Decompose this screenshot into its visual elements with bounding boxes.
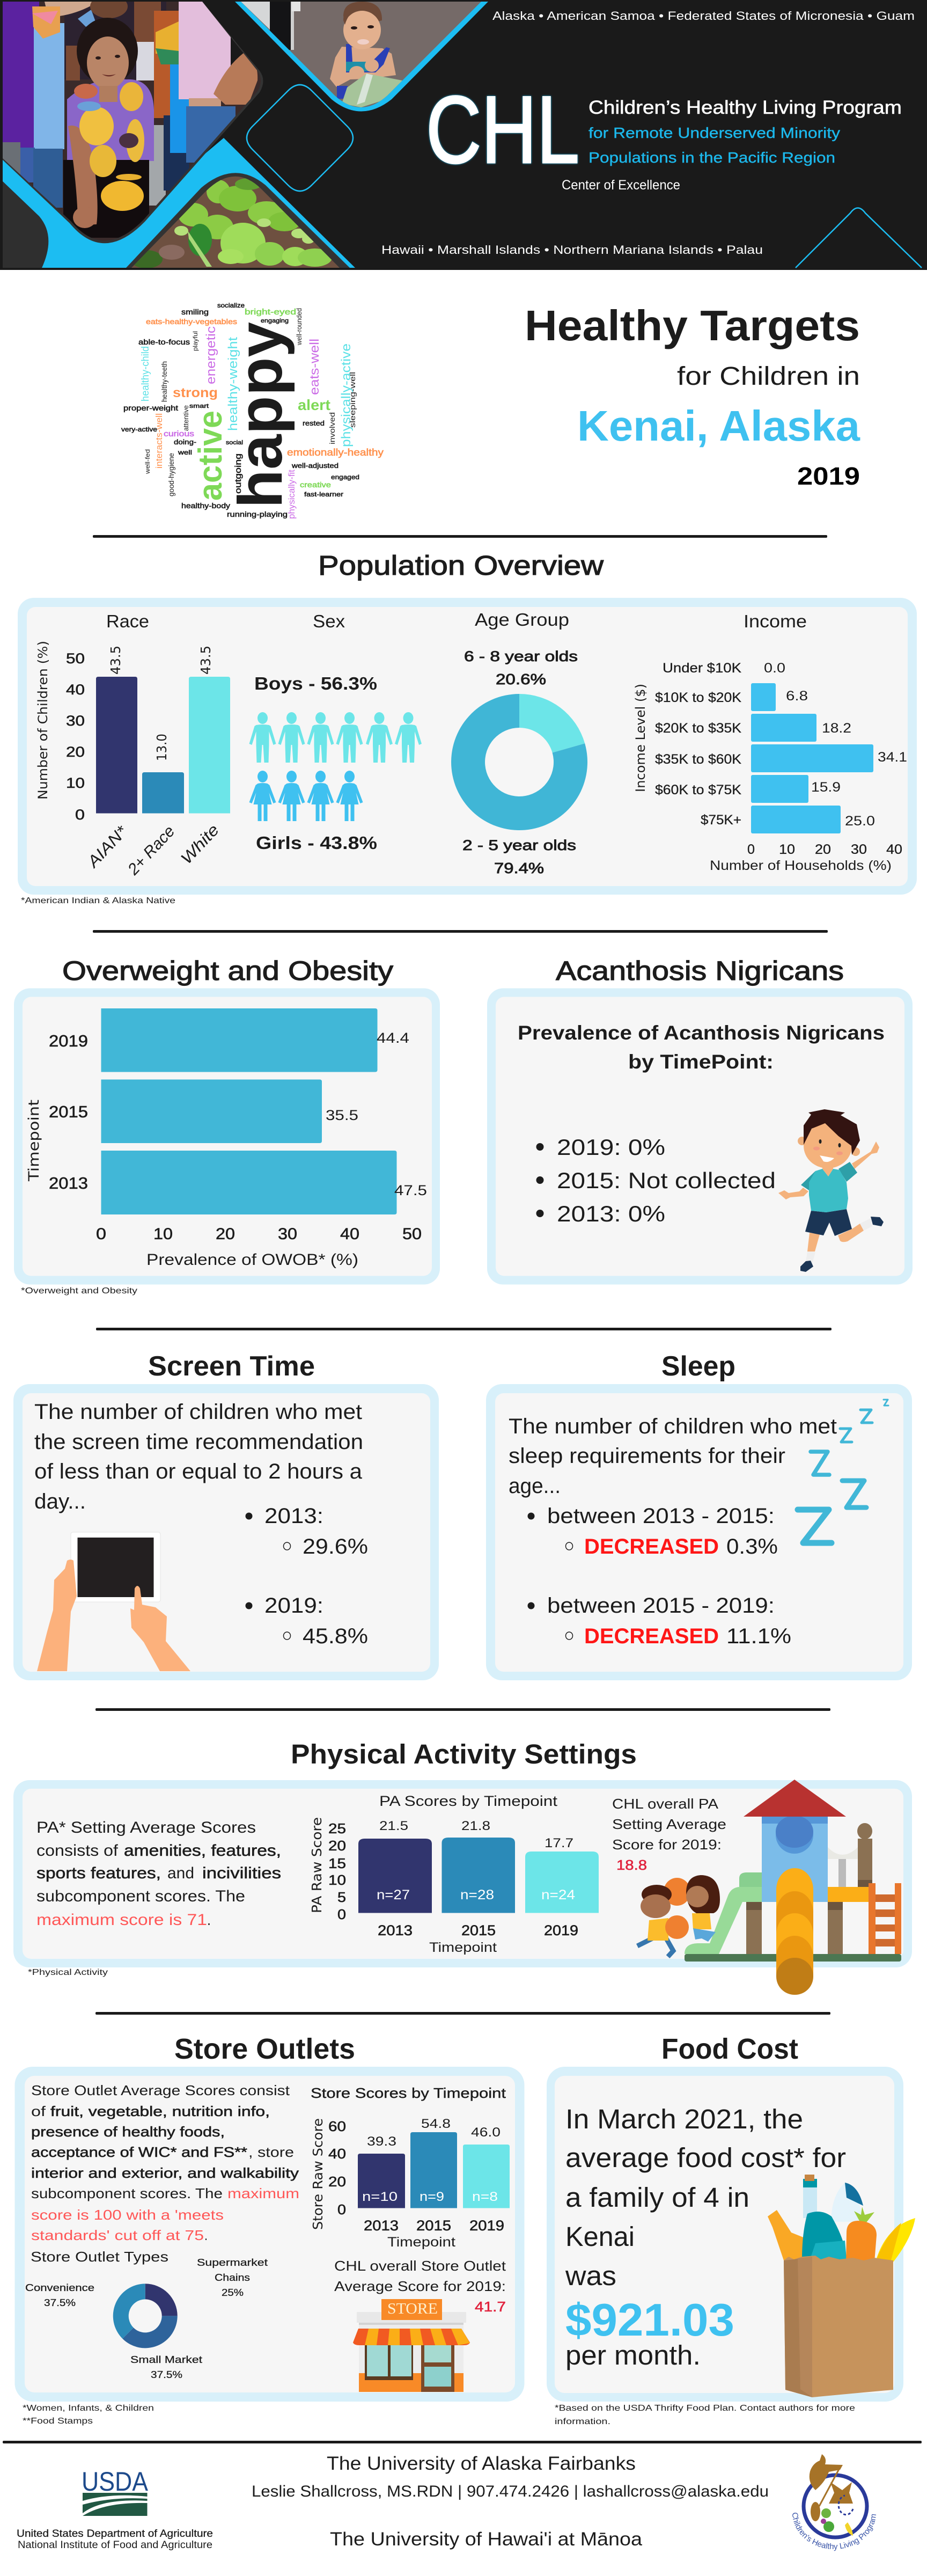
heading: Sleep: Sleep [661,1351,735,1382]
text block: screen time intro: of less than or equal to 2 hours a [34,1460,363,1483]
heading: Population Overview: Population Overview [318,550,604,581]
heading: Screen Time: Screen Time [148,1351,315,1382]
text block: store outlet scores: interior and exterior, and walkability [31,2165,299,2181]
chart: income: Under $10K [663,661,741,676]
word cloud: running-playing [227,510,288,518]
chart: PA scores by timepoint: 2013 [378,1922,413,1938]
chart: race: White [178,821,223,868]
text block: store outlet scores: , store [248,2144,294,2160]
header banner [0,0,927,270]
callout: overall PA score: 18.8 [616,1857,647,1873]
chart: race: Number of Children (%) [35,641,50,800]
footnote: WIC and food stamps [23,2404,154,2426]
word cloud: well [178,449,192,456]
chart: store scores by timepoint: 20 [328,2174,346,2190]
chart: PA scores by timepoint: PA Raw Score [309,1817,325,1913]
bar chart: OWOB prevalence: Prevalence of OWOB* (%) [146,1251,358,1269]
text block: PA setting scores: consists of [36,1842,119,1860]
panel: screen time [13,1384,439,1680]
footnote: food plan: information. [555,2417,610,2426]
text block: sleep intro: sleep requirements for their [509,1444,785,1468]
chart: race: AIAN* [83,822,131,872]
text block: screen time intro: the screen time recommendation [34,1430,363,1454]
chart: race: 30 [66,713,85,729]
text block: PA setting scores: and [167,1864,194,1882]
text block: food cost: Kenai [565,2221,635,2252]
chart: income: 20 [815,842,831,857]
text block: store outlet scores: fruit, vegetable, nutrition info, [50,2103,270,2119]
chart: race: 10 [66,775,85,791]
callout: overall store score [334,2258,506,2315]
chart: race: 40 [66,682,85,698]
chart: income: 0 [747,842,755,857]
word cloud: strong [173,385,218,400]
text block: PA setting scores: maximum score is 71 [36,1911,207,1929]
chart: age group donut: 20.6% [496,671,546,687]
word cloud: eats-well [307,339,322,395]
word cloud: social [226,440,243,446]
chart: PA scores by timepoint: 21.5 [379,1819,408,1833]
chart: income: 40 [886,842,902,857]
text block: screen time intro: The number of children who met [34,1400,362,1424]
contact details: Leslie Shallcross, MS.RDN | 907.474.2426 | lashallcross@alaska.edu [252,2483,769,2500]
word cloud: curious [164,429,194,438]
chart: income: 15.9 [811,780,841,795]
icon row: boys [249,712,422,763]
chart: sex [249,611,422,853]
chart: race: 13.0 [154,734,170,761]
chart: PA scores by timepoint: Timepoint [429,1940,497,1955]
footnote: WIC and food stamps: *Women, Infants, & Children [23,2404,154,2413]
chart: sex: Sex [313,611,345,631]
grey corner shape [3,181,48,268]
chart: race: 50 [66,650,85,667]
text block: food cost: average food cost* for [565,2142,846,2173]
bullet list: 2013: 0% [557,1201,665,1226]
chart: race [35,611,230,879]
chart: income: 30 [851,842,867,857]
word cloud: well-rounded [295,308,303,346]
icon: store front: STORE [387,2300,438,2317]
bar chart: OWOB prevalence [26,1008,427,1269]
word cloud: physically-fit [286,470,297,519]
bullet list: 2015: Not collected [557,1168,776,1193]
chart: income: 10 [779,842,795,857]
footnote: physical activity: *Physical Activity [28,1968,108,1977]
bar chart: OWOB prevalence: 35.5 [326,1107,358,1123]
bullet list: sleep changes: 0.3% [726,1535,778,1558]
text block: PA setting scores: sports features, [36,1864,161,1882]
text block: sleep intro: age... [509,1474,561,1498]
panel: overweight and obesity [14,989,440,1285]
heading: Overweight and Obesity: Overweight and Obesity [62,956,393,986]
panel heading [518,1022,885,1073]
text block: sleep intro [509,1415,837,1498]
logo: Children's Healthy Living Program [792,2454,877,2551]
chart: income: 18.2 [822,721,851,736]
word cloud: healthy-weight [226,337,240,431]
word cloud: attentive [182,405,190,431]
word cloud: healthy-child [140,346,151,401]
word cloud: healthy-teeth [160,361,168,402]
chart: store scores by timepoint: Timepoint [387,2235,455,2250]
chart: income: Income Level ($) [633,684,648,792]
chart: PA scores by timepoint: n=24 [541,1887,575,1902]
bar chart: OWOB prevalence: Timepoint [26,1100,42,1182]
chart: age group donut: 79.4% [494,860,544,876]
word cloud [121,302,384,519]
chart: store scores by timepoint: n=9 [420,2190,444,2204]
logo: USDA: United States Department of Agriculture [17,2528,213,2540]
callout: overall PA score: Setting Average [612,1816,726,1832]
heading: Acanthosis Nigricans: Acanthosis Nigricans [556,956,844,986]
bar chart: OWOB prevalence: 10 [153,1225,173,1243]
chart: income: $35K to $60K [655,752,741,767]
text block: PA setting scores: subcomponent scores. The [36,1887,245,1905]
bar chart: OWOB prevalence: 20 [216,1225,235,1243]
panel: store outlets [15,2067,525,2402]
chart: store scores by timepoint: 40 [328,2146,346,2162]
university: Hawaii at Manoa: The University of Hawai'i at Mānoa [330,2529,643,2550]
chart: PA scores by timepoint: PA Scores by Timepoint [379,1793,558,1809]
heading: Store Outlets: Store Outlets [174,2033,355,2065]
value: food cost: $921.03 [565,2295,734,2346]
diamond outline [247,85,353,191]
bar chart: OWOB prevalence: 2013 [49,1174,88,1192]
text block: store outlet scores: score is 100 with a 'meets [31,2207,224,2223]
chart: PA scores by timepoint: n=27 [377,1887,410,1902]
chart: income: 0.0 [764,661,785,676]
chart: race: 2+ Race [124,822,179,879]
text block: store outlet scores: Store Outlet Average Scores consist [31,2082,290,2098]
chart: store outlet types donut: Chains [215,2272,250,2283]
bullet list: sleep changes: between 2015 - 2019: [547,1594,775,1618]
chart: PA scores by timepoint: 17.7 [545,1836,573,1850]
bullet list [536,1135,776,1226]
year: 2019 [797,462,860,490]
chart: income: 34.1 [878,750,907,765]
chart: PA scores by timepoint: 0 [337,1906,346,1922]
chart: income: $60K to $75K [655,782,741,797]
word cloud: eats-healthy-vegetables [146,317,237,326]
bar chart: OWOB prevalence: 0 [96,1225,106,1243]
word cloud: outgoing [234,453,243,494]
panel: food cost [547,2067,915,2402]
panel heading: Prevalence of Acanthosis Nigricans [518,1022,885,1044]
heading: Physical Activity Settings: Physical Activity Settings [291,1739,637,1769]
program subtitle line 2: Populations in the Pacific Region [588,149,835,166]
chart: PA scores by timepoint: 5 [337,1889,346,1905]
word cloud: energetic [204,326,218,384]
heading: Food Cost: Food Cost [661,2033,798,2065]
chart: PA scores by timepoint: 25 [328,1820,346,1836]
text block: food cost [565,2104,846,2291]
text block: store outlet scores: presence of healthy foods, [31,2124,225,2140]
callout: overall PA score: Score for 2019: [612,1836,722,1853]
word cloud: smart [189,403,209,409]
chart: PA scores by timepoint: 20 [328,1838,346,1854]
text block: food cost: In March 2021, the [565,2104,803,2134]
text block: store outlet scores: subcomponent scores. The [31,2185,223,2201]
chart: PA scores by timepoint: 10 [328,1872,346,1888]
icon: grocery bag [768,2175,915,2397]
chart: age group donut: 2 - 5 year olds [462,837,576,853]
triangle outline [796,208,922,268]
word cloud: bright-eyed [245,308,296,317]
chart: store scores by timepoint: n=10 [362,2190,398,2204]
word cloud: doing- [174,438,196,446]
text block: PA setting scores: PA* Setting Average Scores [36,1819,256,1836]
text block: store outlet scores: . [204,2227,208,2243]
text block: PA setting scores: incivilities [202,1864,281,1882]
chart: store outlet types donut: 37.5% [151,2369,182,2380]
word cloud: sleeping-well [348,372,357,428]
chart: store scores by timepoint: 2019 [469,2218,504,2234]
chart: store scores by timepoint: 0 [337,2201,346,2218]
text block: screen time intro [34,1400,363,1513]
chart: race: 43.5 [108,646,123,675]
logo: USDA: National Institute of Food and Agriculture [18,2540,212,2551]
program name: Children’s Healthy Living Program [588,97,902,118]
bar chart: OWOB prevalence: 2019 [49,1031,88,1050]
chart: race: Race [106,611,149,631]
footnote: food plan [555,2404,855,2426]
location: Kenai, Alaska [577,402,860,450]
footnote: OWOB: *Overweight and Obesity [21,1286,137,1296]
icon: store front [353,2299,470,2392]
chart: store scores by timepoint: Store Scores by Timepoint [311,2085,506,2101]
text block: PA setting scores: amenities, features, [124,1842,281,1860]
word cloud: physically-active [339,343,354,447]
chart: store scores by timepoint: 60 [328,2118,346,2134]
bar chart: OWOB prevalence: 44.4 [377,1030,409,1046]
chart: store outlet types donut [25,2249,268,2380]
bullet list: sleep changes: DECREASED [584,1535,719,1558]
chart: store outlet types donut: Store Outlet Types [31,2249,168,2265]
chart: PA scores by timepoint: 21.8 [461,1819,490,1833]
logo: USDA: USDA [82,2467,149,2497]
icon: running boy [778,1109,884,1272]
bullet list: sleep changes [528,1504,791,1648]
chart: income: 25.0 [845,814,875,829]
photo: toddler holding bag [235,2,488,112]
icon: sleeping Zs [798,1400,888,1543]
chart: store scores by timepoint: Store Raw Score [310,2118,326,2230]
chart: income: $20K to $35K [655,721,741,736]
chart: race: 43.5 [198,646,214,675]
callout: overall store score: Average Score for 2019: [334,2278,506,2294]
title: Healthy Targets [525,302,860,349]
word cloud: proper-weight [123,404,178,412]
word cloud: engaging [261,318,289,324]
callout: overall store score: CHL overall Store Outlet [334,2258,506,2274]
callout: overall store score: 41.7 [475,2299,506,2315]
word cloud: smiling [181,308,209,316]
photo: lettuce garden [126,172,350,268]
logo: CHL: CHL [426,76,579,183]
logo: Children's Healthy Living Program: Children's Healthy Living Program [792,2513,877,2551]
chart: race: 0 [75,807,85,823]
bullet list: sleep changes: between 2013 - 2015: [547,1504,775,1528]
panel: sleep [486,1384,912,1680]
chart: age group donut [451,610,587,876]
word: happy: happy [225,322,295,508]
chart: income: Income [744,611,807,631]
bar chart: OWOB prevalence: 47.5 [394,1182,427,1198]
chart: PA scores by timepoint: 15 [328,1855,346,1871]
word cloud: creative [300,480,331,489]
panel heading: by TimePoint: [628,1051,774,1073]
word cloud: engaged [331,473,359,481]
word cloud: involved [328,412,336,444]
chart: income: $10K to $20K [655,690,741,705]
chart: PA scores by timepoint [309,1793,599,1955]
word cloud: well-adjusted [291,462,339,470]
contact block [252,2453,769,2550]
program subtitle line 1: for Remote Underserved Minority [588,125,840,141]
text block: food cost: a family of 4 in [565,2182,749,2213]
center of excellence: Center of Excellence [562,178,680,193]
chart: store outlet types donut: Small Market [130,2354,202,2365]
word cloud: able-to-focus [138,338,190,346]
blue banner shape [3,138,355,268]
bullet list: screen time values [246,1504,368,1648]
subtitle: for Children in [677,362,860,391]
icon: hands holding tablet [37,1532,190,1671]
chart: store outlet types donut: Convenience [25,2282,94,2293]
chart: age group donut: 6 - 8 year olds [464,648,578,664]
chart: PA scores by timepoint: 2015 [461,1922,496,1938]
text block: PA setting scores [36,1819,281,1929]
callout: overall PA score: CHL overall PA [612,1796,719,1812]
logo: USDA [17,2467,213,2551]
bar chart: OWOB prevalence: 50 [402,1225,422,1243]
chart: store scores by timepoint: 54.8 [421,2117,451,2131]
photo: smiling girl with lei [3,0,266,243]
text block: store outlet scores: standards' cut off at 75 [31,2227,204,2243]
panel: acanthosis nigricans [487,989,913,1285]
chart: PA scores by timepoint: 2019 [544,1922,578,1938]
text block: PA setting scores: . [207,1911,211,1929]
bullet list: sleep changes: 11.1% [726,1624,791,1648]
text block: screen time intro: day... [34,1490,86,1513]
chart: store scores by timepoint: 46.0 [471,2125,501,2140]
bullet list: sleep changes: DECREASED [584,1624,719,1648]
bar chart: OWOB prevalence: 40 [340,1225,359,1243]
word cloud: very-active [121,426,157,433]
icon row: girls [249,771,363,821]
text block: food cost: was [565,2260,616,2291]
chart: sex: Boys - 56.3% [254,674,377,693]
word cloud: socialize [217,302,245,309]
chart: store scores by timepoint: 2015 [416,2218,451,2234]
text block: store outlet scores: of [31,2103,46,2119]
footnote: race: *American Indian & Alaska Native [21,896,175,905]
word: active: active [192,411,229,501]
text block: store outlet scores [31,2082,299,2243]
chart: race: 20 [66,744,85,760]
word cloud: playful [192,331,199,351]
chart: income: 6.8 [786,689,808,704]
chart: store scores by timepoint: 2013 [364,2218,399,2234]
chart: income: $75K+ [701,813,741,828]
text: per month: per month. [565,2340,701,2370]
footnote: food plan: *Based on the USDA Thrifty Food Plan. Contact authors for more [555,2404,855,2413]
chart: age group donut: Age Group [475,610,569,630]
word cloud: rested [303,419,325,427]
word cloud: healthy-body [181,501,230,510]
chart: store scores by timepoint: 39.3 [367,2134,396,2149]
bullet list: screen time values: 2013: [264,1504,323,1528]
text: partner regions top: Alaska • American Samoa • Federated States of Micronesia • Guam [492,9,915,23]
chart: income [633,611,907,873]
callout: overall PA score [612,1796,726,1873]
chart: sex: Girls - 43.8% [256,833,377,853]
bar chart: OWOB prevalence: 2015 [49,1102,88,1121]
chart: store outlet types donut: 37.5% [44,2297,76,2308]
chart: store outlet types donut: 25% [222,2287,244,2298]
chart: store scores by timepoint [310,2085,510,2250]
word cloud: fast-learner [304,491,343,498]
chart: store scores by timepoint: n=8 [472,2190,498,2204]
bullet list: screen time values: 45.8% [303,1624,368,1648]
text block: store outlet scores: maximum [227,2185,299,2201]
title block [525,302,860,490]
word cloud: interacts-well [154,413,164,469]
chart: PA scores by timepoint: n=28 [460,1887,494,1902]
footnote: WIC and food stamps: **Food Stamps [23,2417,93,2426]
bar chart: OWOB prevalence: 30 [278,1225,297,1243]
word cloud: emotionally-healthy [287,447,384,458]
chart: store outlet types donut: Supermarket [197,2257,268,2268]
university: Alaska Fairbanks: The University of Alaska Fairbanks [327,2453,636,2474]
word cloud: alert [298,397,330,413]
text block: sleep intro: The number of children who met [509,1415,837,1438]
panel: population overview [18,598,917,895]
panel: physical activity settings [13,1780,912,1995]
bullet list: screen time values: 29.6% [303,1535,368,1558]
text block: store outlet scores: acceptance of WIC* and FS** [31,2144,247,2160]
text: partner regions bottom: Hawaii • Marshall Islands • Northern Mariana Islands • Palau [381,243,763,257]
word cloud: well-fed [144,449,151,474]
icon: playground with children [637,1780,901,1995]
word cloud: good-hygiene [167,453,175,496]
bullet list: screen time values: 2019: [264,1594,323,1618]
bullet list: 2019: 0% [557,1135,665,1160]
chart: income: Number of Households (%) [710,858,892,873]
